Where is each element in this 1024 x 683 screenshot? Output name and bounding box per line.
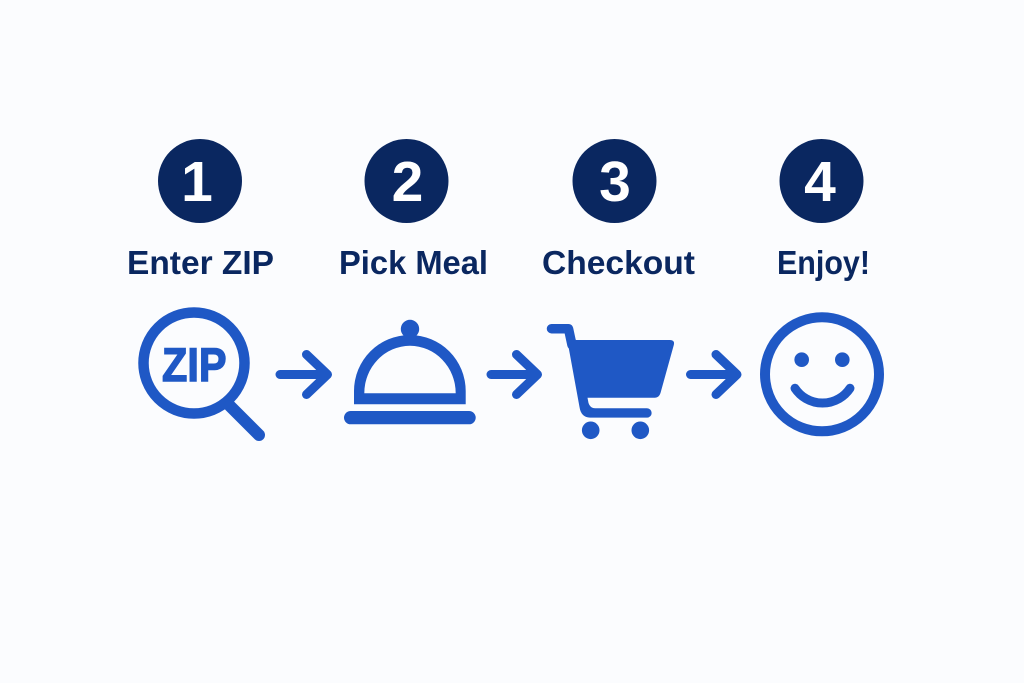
icon: shopping cart xyxy=(552,329,674,439)
arrow: step 1 to step 2 xyxy=(280,354,328,394)
icon: smiley face xyxy=(765,317,879,431)
icon: meal cloche xyxy=(344,320,476,424)
step 4 number badge xyxy=(780,139,864,223)
step 1 number badge xyxy=(158,139,242,223)
step 3 number badge: 3 xyxy=(599,150,631,214)
step 2 label: Pick Meal xyxy=(339,244,488,281)
icon: magnifying glass with ZIP xyxy=(144,312,259,435)
step 1 label: Enter ZIP xyxy=(127,244,274,281)
step 4 label: Enjoy! xyxy=(777,244,870,281)
icon: magnifying glass with ZIP: ZIP xyxy=(162,338,226,391)
step 3 number badge xyxy=(572,139,656,223)
arrow: step 2 to step 3 xyxy=(491,354,538,394)
step 4 number badge: 4 xyxy=(804,150,836,214)
step 2 number badge: 2 xyxy=(392,150,423,214)
step 3 label: Checkout xyxy=(542,244,695,281)
step 2 number badge xyxy=(364,139,448,223)
step 1 number badge: 1 xyxy=(181,150,213,214)
arrow: step 3 to step 4 xyxy=(690,354,737,394)
